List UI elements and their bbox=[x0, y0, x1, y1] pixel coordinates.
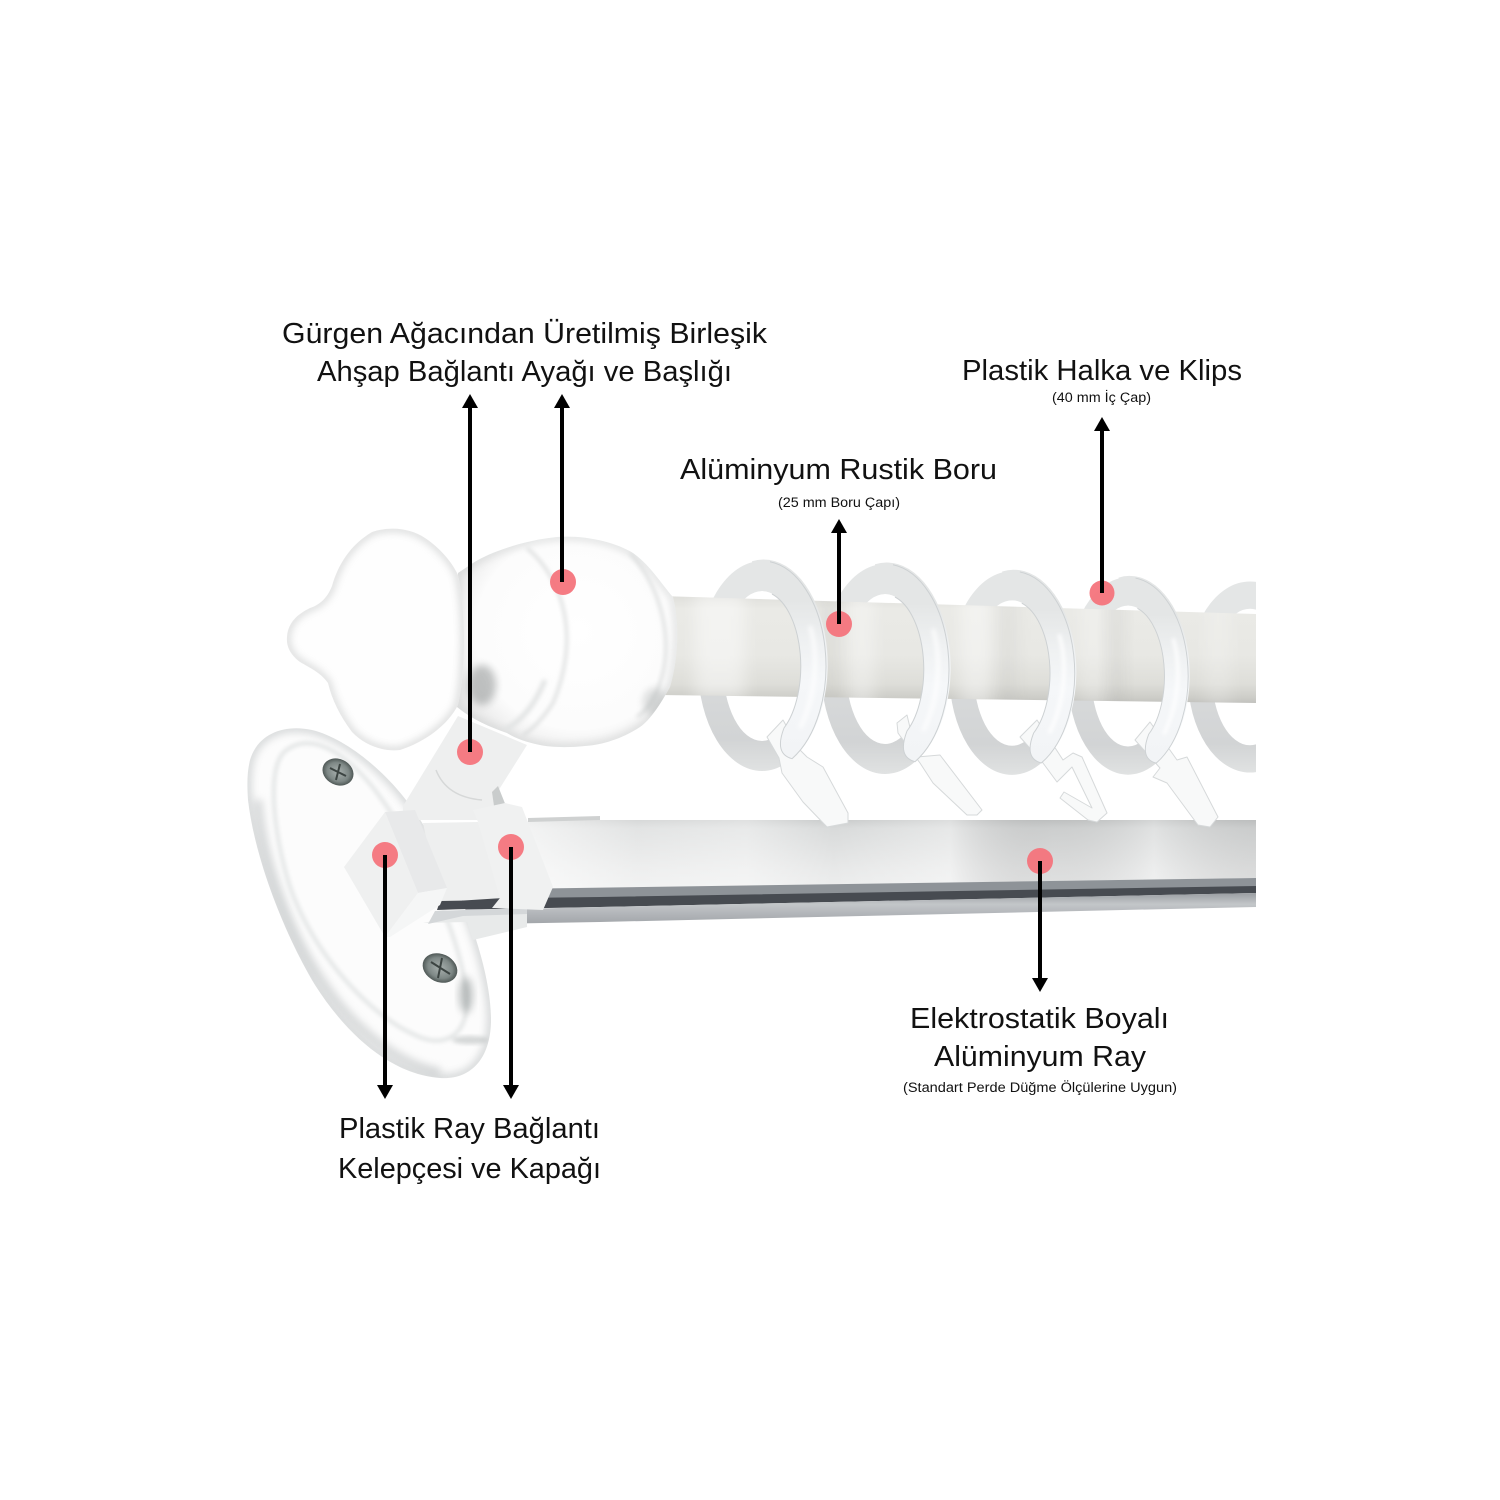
label: plastic rail clamp: Kelepçesi ve Kapağı bbox=[338, 1153, 601, 1185]
screw: top bbox=[322, 758, 354, 786]
finial: wooden end cap bbox=[287, 529, 464, 750]
label: plastic rail clamp bbox=[338, 1113, 601, 1185]
arrow: cover down bbox=[377, 855, 393, 1099]
callout arrows and dots bbox=[372, 394, 1114, 1099]
label: plastic ring and clip: Plastik Halka ve Klips bbox=[962, 355, 1242, 387]
screw: bottom bbox=[422, 953, 458, 983]
label: wooden connector and head: Gürgen Ağacından Üretilmiş Birleşik bbox=[282, 318, 768, 350]
arrow: ball head up bbox=[554, 394, 570, 582]
wall plate bbox=[247, 728, 491, 1078]
label: wooden connector and head bbox=[282, 318, 768, 388]
product photo: curtain rod assembly bbox=[247, 529, 1312, 1078]
label: plastic rail clamp: Plastik Ray Bağlantı bbox=[339, 1113, 600, 1145]
label: aluminium rustic pipe: Alüminyum Rustik Boru bbox=[680, 454, 997, 486]
pipe: aluminium rod bbox=[666, 596, 1256, 703]
label: plastic ring and clip bbox=[962, 355, 1242, 405]
clamp: rail connection and cover bbox=[344, 803, 553, 940]
label: wooden connector and head: Ahşap Bağlantı Ayağı ve Başlığı bbox=[317, 356, 732, 388]
rail: electrostatic painted aluminium bbox=[435, 816, 1256, 925]
label: aluminium rail: Alüminyum Ray bbox=[934, 1041, 1147, 1073]
arrow: ring up bbox=[1094, 417, 1110, 593]
rings front halves bbox=[752, 560, 1190, 763]
label: plastic ring and clip: (40 mm İç Çap) bbox=[1052, 390, 1151, 405]
label: aluminium rail bbox=[903, 1003, 1177, 1095]
curtain clips bbox=[767, 715, 1218, 827]
arrow: connector leg up bbox=[462, 394, 478, 752]
label: aluminium rail: (Standart Perde Düğme Ölçülerine Uygun) bbox=[903, 1080, 1177, 1095]
label: aluminium rustic pipe: (25 mm Boru Çapı) bbox=[778, 495, 900, 510]
label: aluminium rail: Elektrostatik Boyalı bbox=[910, 1003, 1169, 1035]
arrow: pipe up bbox=[831, 519, 847, 624]
ball head: wooden mount bbox=[457, 537, 677, 747]
arrow: rail down bbox=[1032, 861, 1048, 992]
rings back halves bbox=[700, 562, 1256, 775]
arrow stems over dots bbox=[383, 565, 1104, 876]
arrow: clamp down bbox=[503, 847, 519, 1099]
dots bbox=[372, 569, 1114, 874]
label: aluminium rustic pipe bbox=[680, 454, 997, 510]
bracket arm bbox=[403, 716, 527, 820]
